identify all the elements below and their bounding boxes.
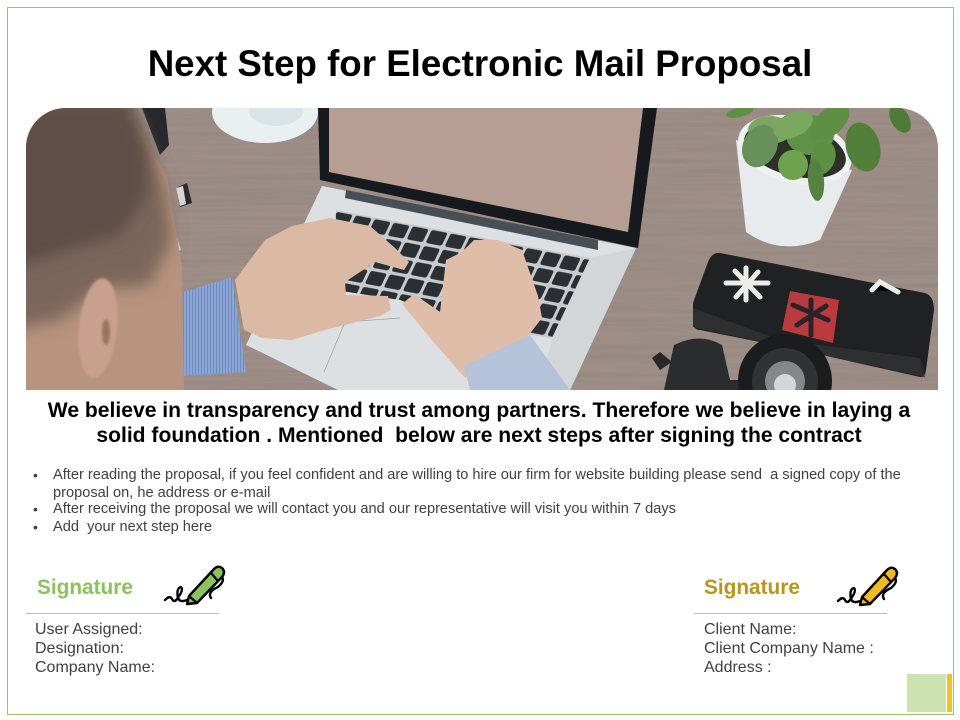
- signature heading green: Signature: [37, 576, 133, 599]
- next steps bullet list: [33, 467, 901, 535]
- signature heading gold: Signature: [704, 576, 800, 599]
- next steps bullet list: Add your next step here: [53, 519, 212, 535]
- next steps bullet list: •: [33, 467, 38, 483]
- next steps bullet list: After reading the proposal, if you feel confident and are willing to hire our firm for website building please send a signed copy of the proposal on, he address or e-mail: [53, 467, 901, 501]
- camera strap objects: [142, 108, 192, 253]
- shirt cuffs: [183, 277, 570, 390]
- next steps bullet list: After receiving the proposal we will contact you and our representative will visit you within 7 days: [53, 501, 676, 517]
- divider: [694, 613, 887, 614]
- user fields: User Assigned: Designation: Company Name:: [35, 621, 155, 676]
- icon: yellow pen signing: [836, 566, 898, 606]
- black pouch: [693, 253, 934, 377]
- corner accent square: [907, 674, 952, 712]
- coffee cup and saucer: [212, 108, 318, 143]
- laptop: [246, 108, 657, 390]
- next steps bullet list: •: [33, 519, 38, 535]
- client fields: Client Name: Client Company Name : Address :: [704, 621, 874, 676]
- camera: [652, 336, 832, 390]
- icon: green pen signing: [164, 566, 226, 606]
- photo: man typing on laptop at desk: [26, 108, 938, 390]
- intro statement: We believe in transparency and trust among partners. Therefore we believe in laying a solid foundation . Mentioned below are next steps after signing the contract: [48, 399, 910, 447]
- signature block: user: [26, 566, 226, 676]
- signature block: client: [694, 566, 898, 676]
- hands: [235, 218, 542, 378]
- divider: [26, 613, 219, 614]
- title: Next Step for Electronic Mail Proposal: [148, 43, 812, 84]
- man's head: [26, 108, 184, 390]
- desk: [26, 108, 938, 390]
- plant in white pot: [725, 97, 915, 246]
- next steps bullet list: •: [33, 501, 38, 517]
